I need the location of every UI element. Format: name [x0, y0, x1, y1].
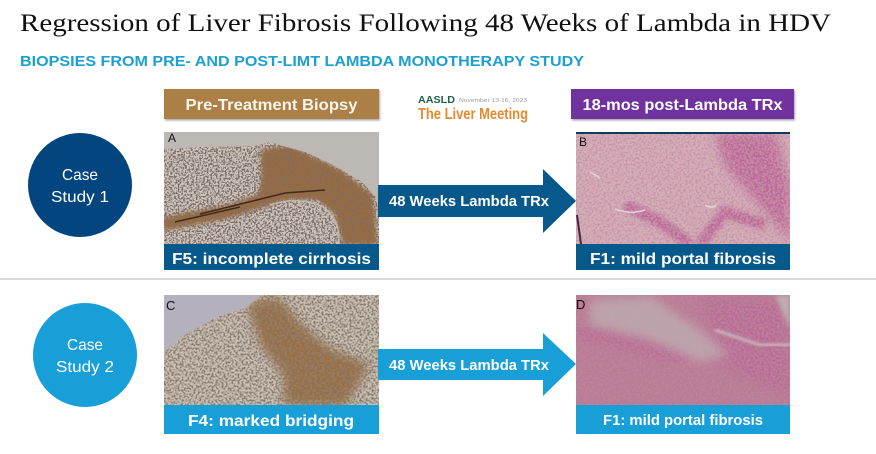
photo A: brown stained biopsy: A [168, 131, 176, 145]
circle: case study 1 [28, 133, 132, 237]
circle: case study 2: Case [67, 337, 103, 354]
label: F1 mild portal fibrosis, case 1 [576, 244, 790, 270]
photo B: pink stained biopsy [576, 132, 790, 244]
label: F4 marked bridging: F4: marked bridging [188, 413, 354, 430]
divider [0, 278, 876, 280]
circle: case study 1: Case [62, 167, 98, 184]
circle: case study 2: Study 2 [56, 359, 114, 376]
label: F1 mild portal fibrosis, case 1: F1: mild portal fibrosis [590, 251, 776, 268]
header: 18-mos post-Lambda TRx: 18-mos post-Lambda TRx [582, 97, 783, 114]
label: F5 incomplete cirrhosis: F5: incomplete cirrhosis [172, 251, 371, 268]
photo A: brown stained biopsy [164, 131, 379, 244]
circle: case study 2 [33, 303, 137, 407]
arrow: 48 weeks lambda, case 1: 48 Weeks Lambda TRx [389, 194, 549, 210]
arrow: 48 weeks lambda, case 2: 48 Weeks Lambda TRx [389, 358, 549, 374]
header: pre-treatment biopsy [164, 89, 379, 119]
photo D: pink stained biopsy: D [576, 297, 585, 312]
title: Regression of Liver Fibrosis Following 48 Weeks of Lambda in HDV [20, 8, 832, 37]
photo D: pink stained biopsy [576, 295, 790, 405]
label: F4 marked bridging [164, 405, 379, 434]
label: F5 incomplete cirrhosis [164, 244, 379, 270]
photo C: brown stained biopsy [164, 295, 379, 405]
photo B: pink stained biopsy: B [579, 135, 587, 149]
subtitle: BIOPSIES FROM PRE- AND POST-LIMT LAMBDA MONOTHERAPY STUDY [20, 53, 584, 70]
header: pre-treatment biopsy: Pre-Treatment Biopsy [186, 97, 358, 114]
logo: AASLD The Liver Meeting: The Liver Meeting [418, 106, 528, 123]
logo: AASLD The Liver Meeting: November 13-16, 2023 [459, 98, 527, 104]
label: F1 mild portal fibrosis, case 2 [576, 405, 790, 434]
logo: AASLD The Liver Meeting [418, 95, 528, 123]
arrow: 48 weeks lambda, case 2 [378, 333, 576, 396]
arrow: 48 weeks lambda, case 1 [378, 169, 576, 233]
label: F1 mild portal fibrosis, case 2: F1: mild portal fibrosis [603, 413, 763, 429]
header: 18-mos post-Lambda TRx [571, 89, 794, 119]
logo: AASLD The Liver Meeting: AASLD [418, 95, 455, 106]
photo C: brown stained biopsy: C [166, 298, 175, 313]
circle: case study 1: Study 1 [51, 189, 109, 206]
